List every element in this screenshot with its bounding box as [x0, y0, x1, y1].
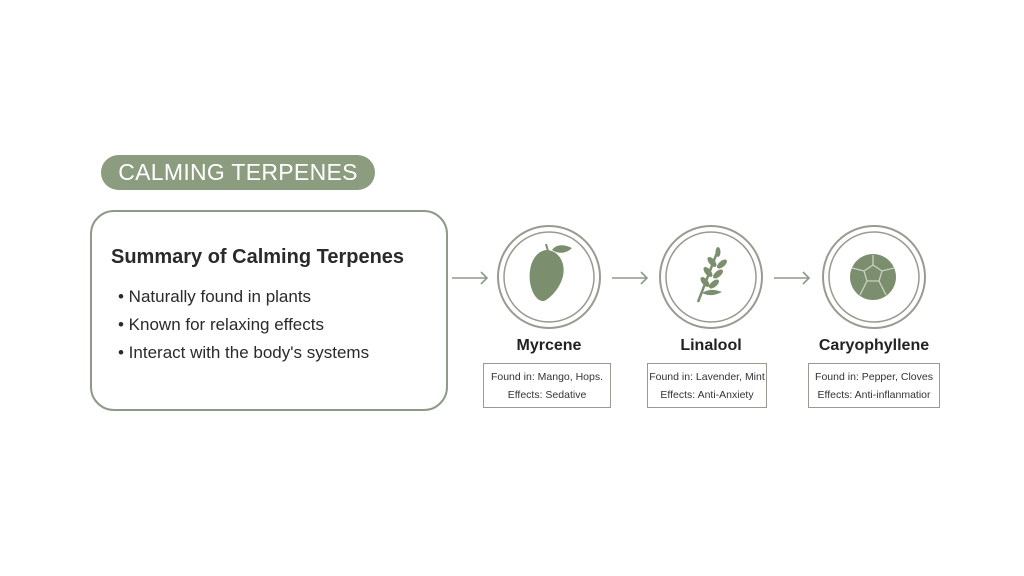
bullet list [118, 287, 369, 362]
label: Caryophyllene: Caryophyllene [819, 337, 929, 354]
info box: Myrcene: Effects: Sedative [508, 389, 586, 401]
info box: Myrcene [483, 363, 611, 408]
panel: summary [90, 210, 448, 411]
arrow 2 [612, 272, 647, 284]
label: Linalool: Linalool [680, 337, 742, 354]
info box: Caryophyllene [808, 363, 940, 408]
info box: Caryophyllene: Found in: Pepper, Cloves [815, 371, 933, 383]
arrow 1 [452, 272, 487, 284]
heading: summary: Summary of Calming Terpenes [111, 246, 404, 268]
icon: mango circle [498, 226, 600, 328]
info box: Linalool [647, 363, 767, 408]
bullet list: • Interact with the body's systems [118, 343, 369, 362]
bullet list: • Naturally found in plants [118, 287, 311, 306]
title pill [101, 155, 375, 190]
bullet list: • Known for relaxing effects [118, 315, 324, 334]
info box: Myrcene: Found in: Mango, Hops. [491, 371, 603, 383]
info box: Caryophyllene: Effects: Anti-inflanmatior [817, 389, 931, 401]
info box: Linalool: Effects: Anti-Anxiety [660, 389, 754, 401]
icon: lavender circle [660, 226, 762, 328]
label: Myrcene: Myrcene [517, 337, 581, 354]
icon: peppercorn circle [823, 226, 925, 328]
title pill: CALMING TERPENES [118, 159, 358, 185]
info box: Linalool: Found in: Lavender, Mint [649, 371, 765, 383]
arrow 3 [774, 272, 809, 284]
